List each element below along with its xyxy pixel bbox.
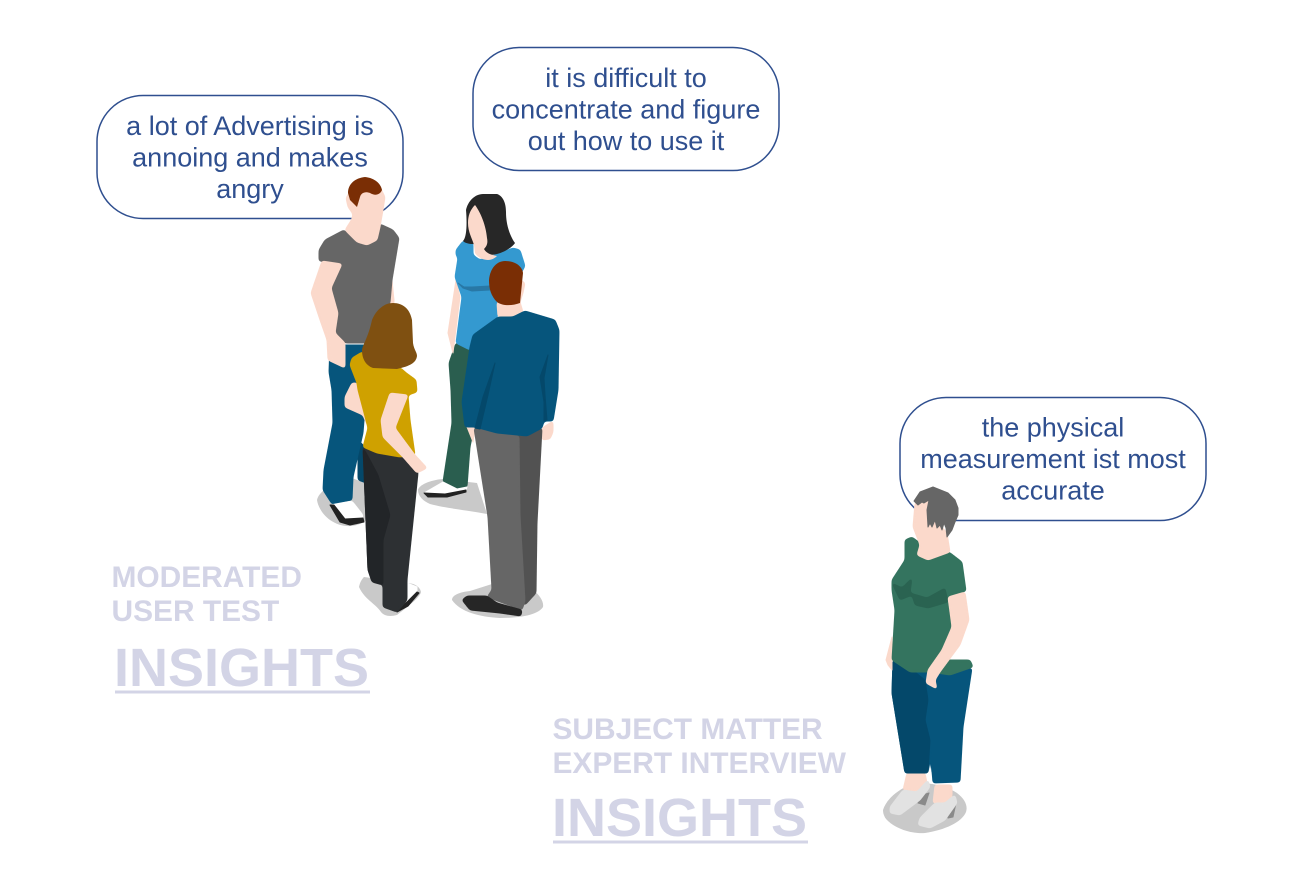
speech bubble: physical measurement xyxy=(900,398,1206,520)
speech bubble: difficult to concentrate: it is difficult to xyxy=(545,63,707,93)
speech bubble: physical measurement: accurate xyxy=(1001,476,1105,506)
speech bubble: physical measurement: the physical xyxy=(982,412,1124,442)
person: man in navy sweater from behind xyxy=(452,261,559,618)
person: man in gray shirt xyxy=(311,177,399,526)
heading: subject matter expert interview insights: INSIGHTS xyxy=(552,788,807,848)
heading: subject matter expert interview insights: SUBJECT MATTER xyxy=(552,713,823,746)
speech bubble: advertising xyxy=(97,96,403,218)
speech bubble: advertising: angry xyxy=(216,174,284,204)
heading: moderated user test insights: MODERATED xyxy=(112,561,302,594)
speech bubble: advertising: annoing and makes xyxy=(132,142,368,172)
heading: moderated user test insights: USER TEST xyxy=(112,595,279,628)
speech bubble: difficult to concentrate xyxy=(473,48,779,170)
heading: moderated user test insights xyxy=(112,561,370,698)
heading: moderated user test insights: INSIGHTS xyxy=(114,638,369,698)
speech bubble: physical measurement: measurement ist most xyxy=(920,444,1186,474)
person: woman in yellow shirt xyxy=(345,303,427,616)
speech bubble: difficult to concentrate: concentrate and figure xyxy=(492,94,760,124)
person: woman in blue shirt xyxy=(418,194,525,514)
heading: subject matter expert interview insights xyxy=(552,713,847,848)
speech bubble: advertising: a lot of Advertising is xyxy=(126,111,374,141)
speech bubble: difficult to concentrate: out how to use it xyxy=(528,126,725,156)
heading: subject matter expert interview insights: EXPERT INTERVIEW xyxy=(552,747,847,780)
person: woman in green shirt xyxy=(883,487,973,833)
